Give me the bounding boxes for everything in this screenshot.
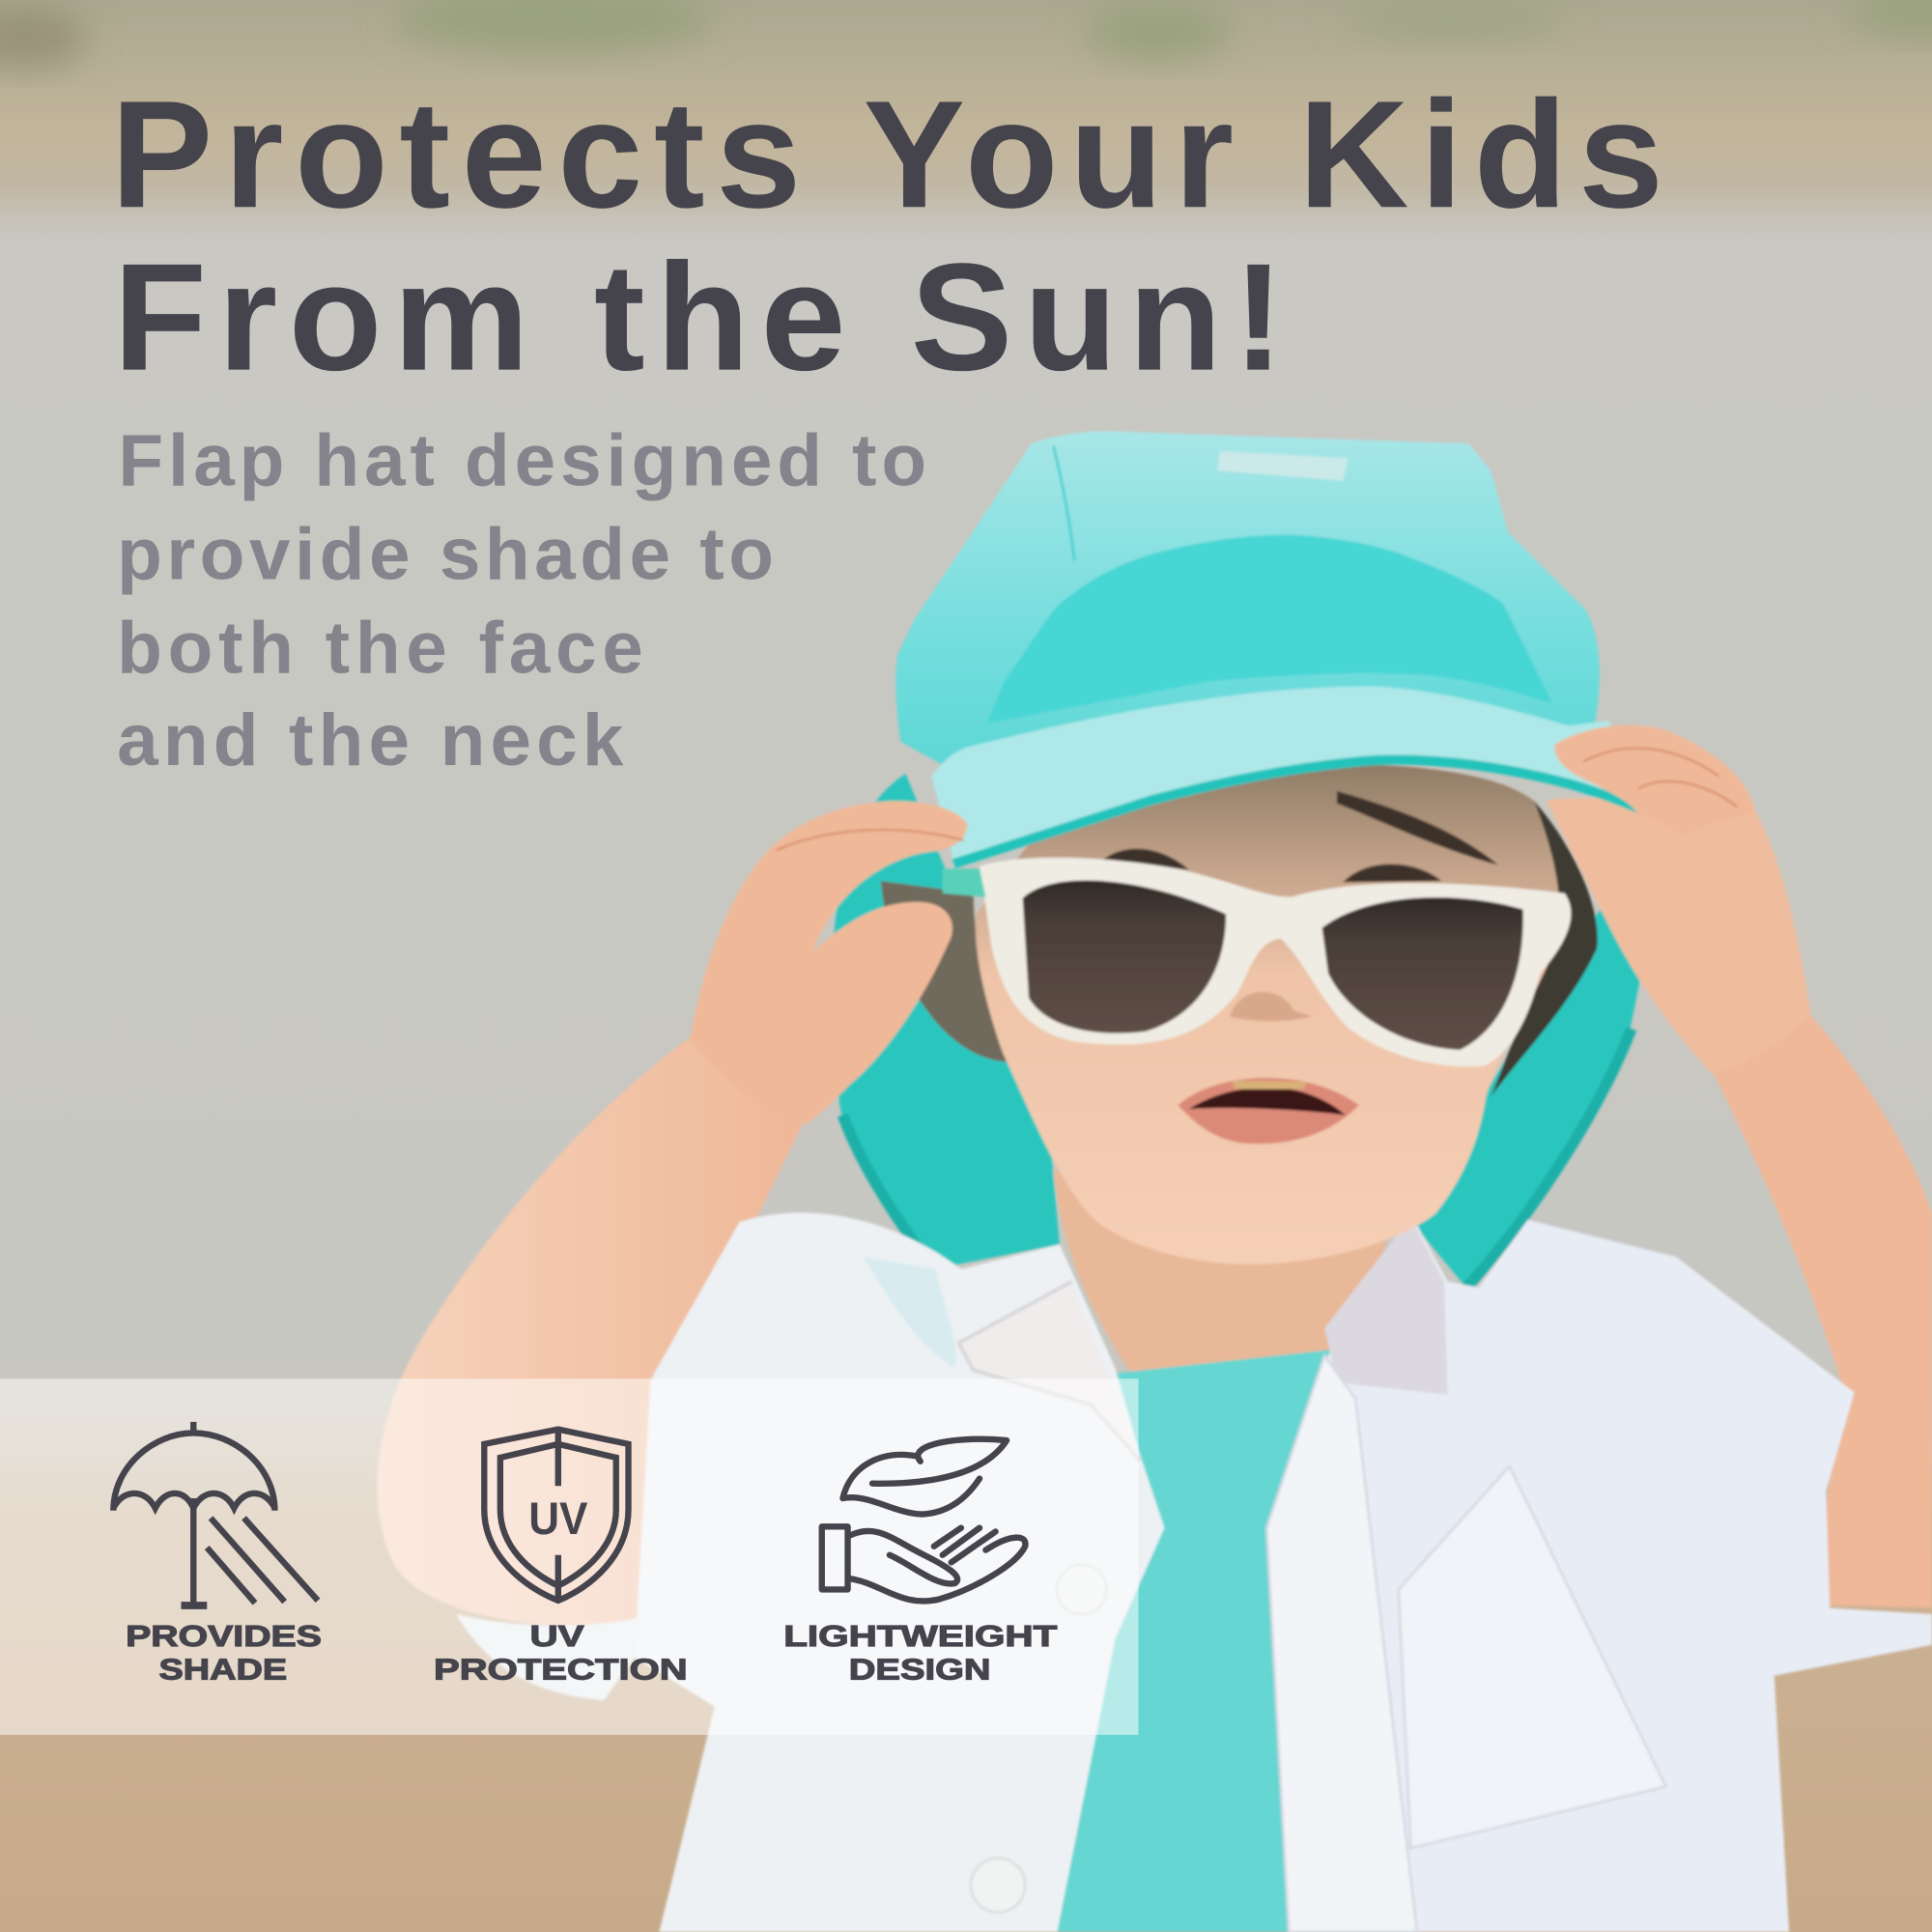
feature panel — [0, 1378, 1139, 1735]
label: lightweight design: LIGHTWEIGHT — [783, 1620, 1058, 1653]
right arm — [1713, 1012, 1932, 1608]
photo: child wearing flap hat and sunglasses — [377, 431, 1932, 1932]
right palm — [1547, 798, 1811, 1074]
label: uv protection: UV — [529, 1620, 584, 1653]
subtitle text block: provide shade to — [117, 513, 774, 595]
sunglasses — [943, 858, 1571, 1066]
label: provides shade: SHADE — [159, 1654, 287, 1687]
title: From the Sun! — [113, 232, 1284, 403]
eyebrow and lashes — [1103, 791, 1498, 882]
feature: lightweight design — [783, 1439, 1058, 1687]
mouth — [1178, 1078, 1359, 1144]
ears and hair shadow — [881, 801, 1598, 1096]
shirt right side — [971, 1213, 1932, 1932]
icon: umbrella with sun rays — [113, 1422, 318, 1605]
subtitle text block: both the face — [117, 607, 643, 689]
label: provides shade — [126, 1620, 322, 1687]
label: lightweight design — [783, 1620, 1058, 1687]
shirt left side — [456, 1212, 1164, 1932]
icon: leaf over open hand — [822, 1439, 1025, 1601]
right hand fingers — [1554, 725, 1756, 836]
subtitle text block: and the neck — [117, 699, 624, 781]
feature: provides shade — [113, 1422, 322, 1687]
subtitle text block — [117, 420, 926, 781]
icon: uv shield: UV — [528, 1493, 588, 1545]
title — [111, 69, 1663, 403]
label: lightweight design: DESIGN — [849, 1654, 991, 1687]
hat neck flap — [833, 774, 1665, 1288]
subtitle text block: Flap hat designed to — [118, 420, 926, 502]
neck — [1054, 1171, 1395, 1386]
hat brim — [931, 686, 1669, 867]
title: Protects Your Kids — [111, 69, 1663, 240]
label: uv protection — [434, 1620, 688, 1687]
left hand — [690, 801, 967, 1127]
t-shirt — [1047, 1350, 1337, 1932]
feature: uv protection — [434, 1430, 688, 1687]
icon: uv shield — [484, 1430, 629, 1601]
face — [976, 764, 1559, 1264]
label: uv protection: PROTECTION — [434, 1654, 688, 1687]
nose shading — [1230, 992, 1312, 1021]
label: provides shade: PROVIDES — [126, 1620, 322, 1653]
left arm — [377, 1037, 801, 1628]
hat crown — [895, 431, 1600, 788]
